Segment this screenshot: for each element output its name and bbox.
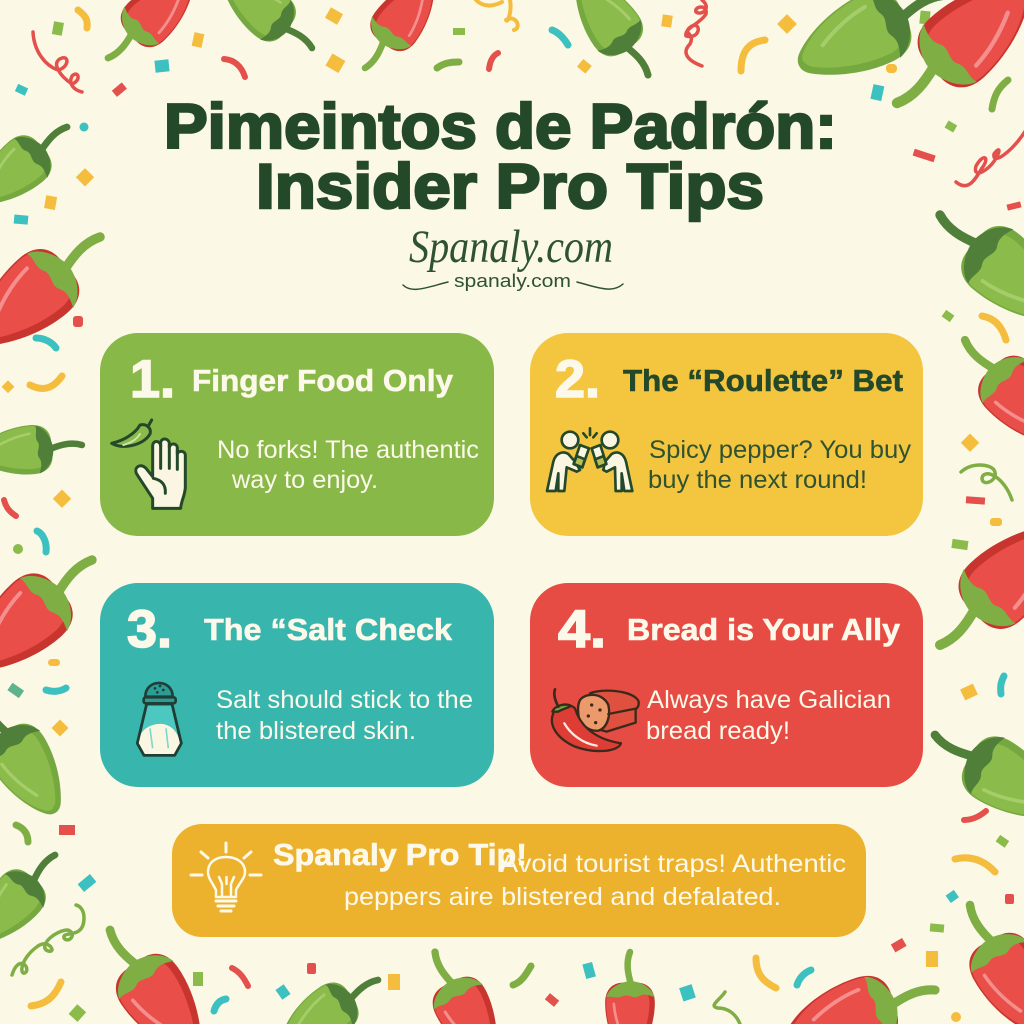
icon: red pepper [90,0,208,77]
panel: tip 1 finger food: way to enjoy. [231,466,378,494]
body text: No forks! The authentic [217,436,479,464]
heading: Bread is Your Ally: Bread is Your Ally [627,612,901,647]
heading: Finger Food Only: Finger Food Only [192,363,454,398]
panel: tip 4 bread [530,583,923,787]
icon: red pepper [778,957,945,1024]
panel: tip 2 roulette: buy the next round! [648,466,867,494]
body text: Always have Galician [647,686,891,714]
icon: green pepper [209,0,328,68]
icon: red pepper [410,939,515,1024]
icon: green pepper [0,420,84,479]
title: Insider Pro Tips [256,152,764,222]
icon: green pepper [558,0,670,91]
icon: light bulb [191,843,261,911]
number 2: 2. [555,350,600,409]
callout text: Avoid tourist traps! Authentic [500,850,846,878]
icon: red pepper [941,889,1024,1024]
heading: The Roulette Bet: The “Roulette” Bet [623,363,903,398]
icon: green pepper [918,706,1024,840]
title [164,92,837,222]
logo: Spanaly.com: Spanaly.com [409,221,613,273]
icon: pepper and bread [552,689,639,751]
title: Pimeintos de Padrón: [164,92,837,162]
icon: red pepper [942,318,1024,463]
panel: tip 2 roulette [530,333,923,536]
callout: Spanaly pro tip: peppers aire blistered and defalated. [344,883,781,911]
panel: tip 1 finger food [100,333,494,536]
number 4: 4. [558,600,606,659]
icon: green pepper [0,838,74,958]
icon: red pepper [870,0,1024,132]
icon: salt shaker [137,683,181,755]
icon: red pepper [914,502,1024,673]
icon: red pepper [82,910,223,1024]
icon: red pepper [345,0,450,83]
panel: tip 3 salt check: the blistered skin. [216,717,416,745]
logo: Spanaly.com: spanaly.com [454,271,571,291]
panel: tip 3 salt check [100,583,494,787]
icon: green pepper [783,0,961,99]
icon: green pepper [0,107,84,221]
panel: tip 4 bread: bread ready! [646,717,790,745]
body text: Salt should stick to the [216,686,473,714]
number 3: 3. [127,600,172,659]
icon: red pepper [0,209,124,368]
icon: hand and pepper [112,420,185,508]
logo: Spanaly.com [403,221,623,291]
icon: green pepper [917,187,1024,343]
icon: green pepper [270,959,392,1024]
icon: red pepper [605,952,655,1024]
callout: Spanaly pro tip [172,824,866,937]
body text: Spicy pepper? You buy [649,436,912,464]
icon: green pepper [0,684,81,829]
icon: red pepper [0,533,116,693]
heading: The Salt Check: The “Salt Check [204,612,453,647]
callout heading: Spanaly Pro Tip! [273,837,527,872]
icon: two people toasting [547,428,632,491]
number 1: 1. [130,350,175,409]
